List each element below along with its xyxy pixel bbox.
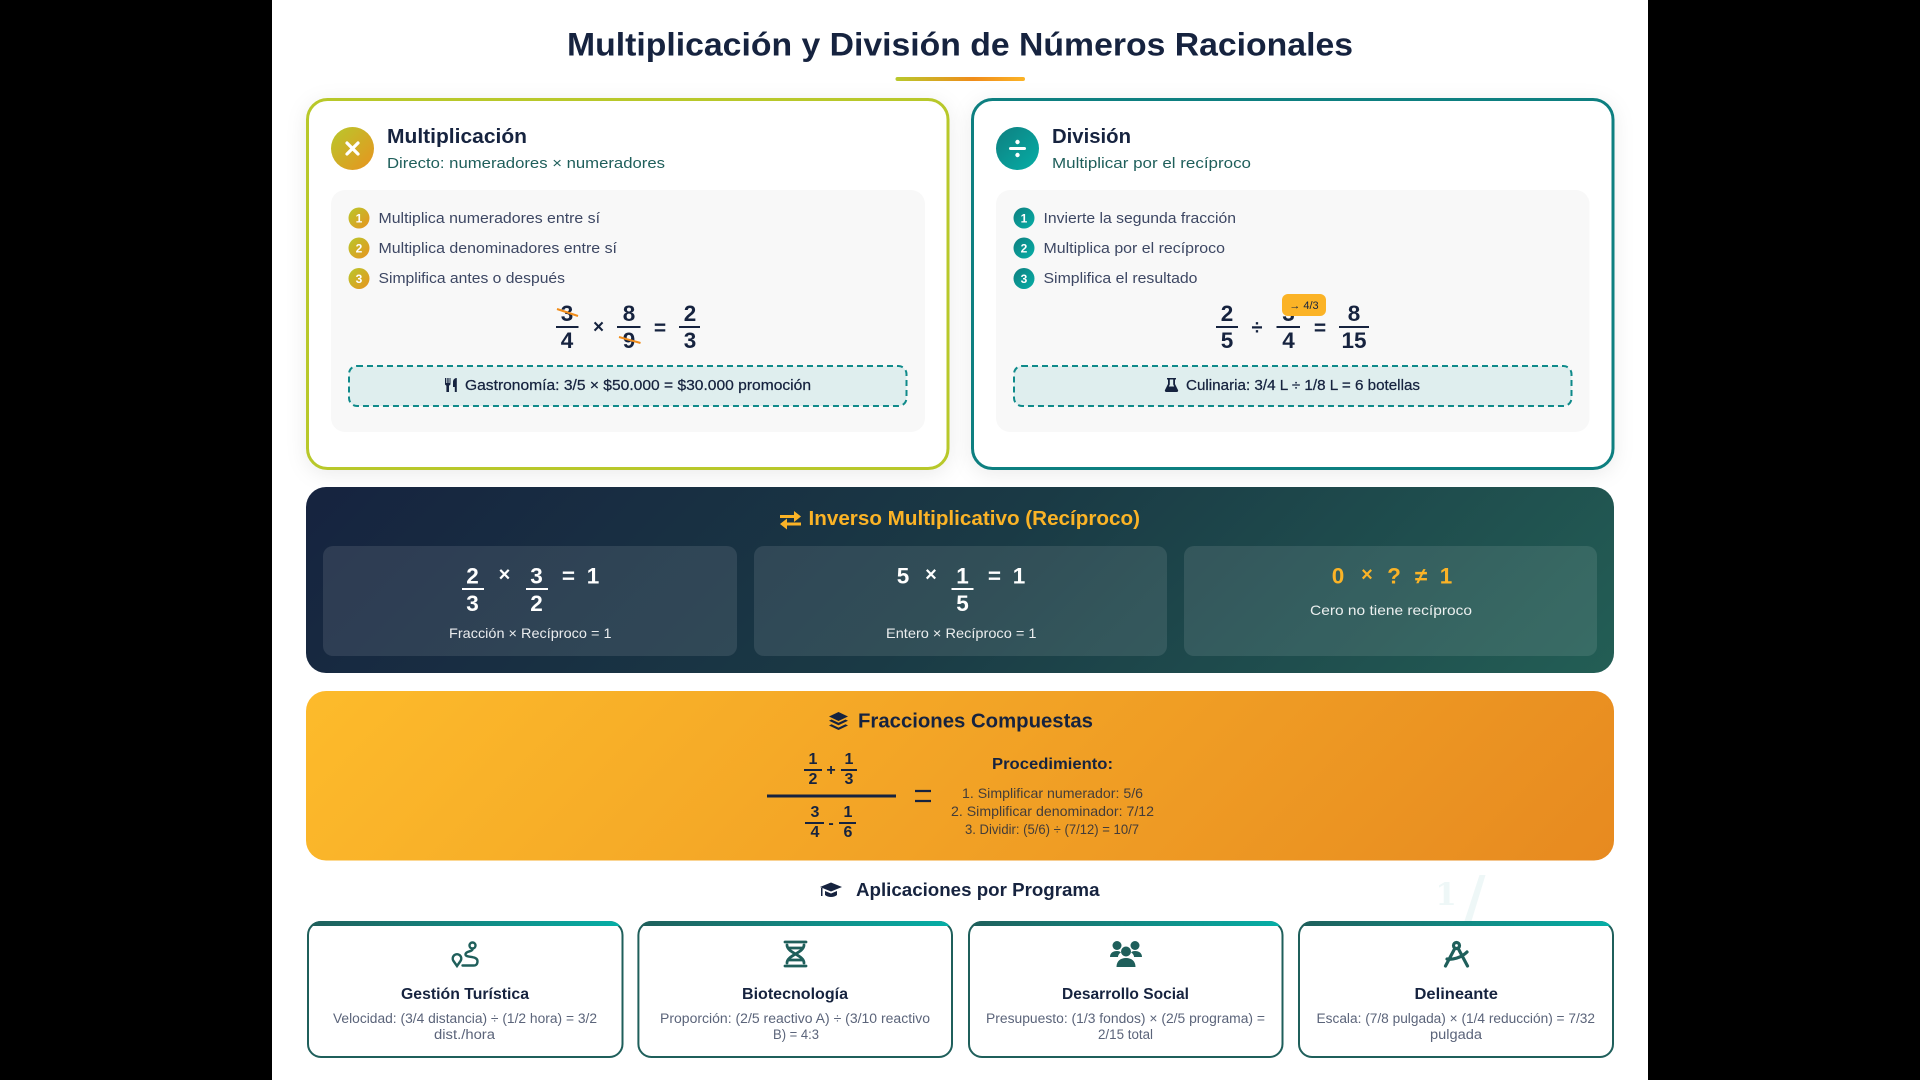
icon: dna: [785, 942, 806, 966]
badge: reciprocal: [1282, 294, 1326, 316]
step 3: [1014, 268, 1198, 289]
card: cero: ≠: [1415, 564, 1428, 588]
formula: multiplication: 2: [684, 301, 696, 326]
step 3: 3: [356, 272, 363, 286]
decorative watermark fraction: 1: [1435, 877, 1457, 913]
procedure: 1. Simplificar numerador: 5/6: [962, 785, 1143, 801]
card: entero: 5: [956, 591, 969, 616]
compound fraction: 3: [845, 771, 854, 788]
compound fraction: 1: [845, 751, 854, 768]
card: fracción: =: [562, 564, 575, 588]
step 2: Multiplica por el recíproco: [1044, 241, 1225, 257]
compound fraction: 1: [844, 804, 853, 821]
panel: fracciones compuestas: [306, 691, 1614, 860]
steps panel: [331, 190, 925, 432]
step 3: Simplifica antes o después: [378, 271, 565, 287]
step 1: 1: [1021, 212, 1028, 226]
white page column: [272, 0, 1648, 1080]
icon: multiply: [331, 127, 374, 170]
card: cero: ?: [1387, 564, 1401, 588]
card: entero: ×: [925, 564, 937, 586]
example callout: culinaria: Culinaria: 3/4 L ÷ 1/8 L = 6 botellas: [1186, 378, 1420, 394]
card: fracción: 3: [466, 591, 479, 616]
card: biotecnología: Proporción: (2/5 reactivo A) ÷ (3/10 reactivo: [660, 1011, 930, 1026]
title underline: [896, 77, 1025, 81]
card: entero: =: [988, 564, 1001, 588]
step 2: 2: [356, 242, 363, 256]
compound fraction: 4: [811, 824, 820, 841]
heading: Multiplicación: [387, 126, 527, 148]
panel: multiplicación: [308, 100, 948, 468]
example callout: gastronomía: [349, 366, 906, 406]
compound fraction: 6: [844, 824, 853, 841]
formula: multiplication: 9: [623, 328, 635, 353]
compound fraction: -: [828, 815, 834, 832]
formula: division: 3: [1282, 301, 1295, 326]
icon: utensils: [445, 378, 457, 392]
formula: division: ÷: [1252, 317, 1263, 339]
subtitle: Directo: numeradores × numeradores: [387, 155, 665, 172]
heading: División: [1052, 126, 1131, 148]
badge: reciprocal: → 4/3: [1289, 300, 1319, 312]
formula: division: 5: [1221, 328, 1233, 353]
step 1: Multiplica numeradores entre sí: [378, 211, 600, 227]
panel: inverso multiplicativo: [306, 487, 1614, 673]
steps panel: [996, 190, 1590, 432]
compound fraction: 3: [811, 804, 820, 821]
card: cero: 1: [1440, 564, 1452, 588]
formula: multiplication: 3: [684, 328, 696, 353]
procedure: [951, 756, 1154, 837]
card: cero: 0: [1332, 564, 1344, 588]
step 3: Simplifica el resultado: [1044, 271, 1198, 287]
step 2: [348, 238, 617, 258]
title: Multiplicación y División de Números Racionales: [567, 26, 1353, 62]
icon: graduation cap: [820, 882, 842, 897]
card: fracción: 2: [530, 591, 543, 616]
card: entero: 1: [1013, 564, 1025, 588]
icon: users: [1110, 941, 1142, 967]
icon: flask: [1165, 378, 1178, 392]
card: entero: Entero × Recíproco = 1: [886, 625, 1037, 641]
step 1: [1014, 208, 1236, 228]
formula: division: 4: [1282, 328, 1295, 353]
card: gestión turística: Velocidad: (3/4 distancia) ÷ (1/2 hora) = 3/2: [333, 1011, 597, 1026]
formula: division: [1216, 294, 1369, 353]
card: delineante: [1299, 921, 1613, 1057]
procedure: Procedimiento:: [992, 756, 1113, 773]
decorative watermark fraction: [1435, 875, 1486, 921]
compound fraction: +: [826, 762, 836, 779]
card: entero: 5: [897, 564, 909, 588]
card: desarrollo social: [969, 921, 1282, 1057]
card: fracción: [323, 546, 737, 656]
formula: multiplication: 3: [561, 301, 573, 326]
card: desarrollo social: 2/15 total: [1098, 1027, 1153, 1042]
compound fraction: 1: [809, 751, 818, 768]
card: desarrollo social: Presupuesto: (1/3 fondos) × (2/5 programa) =: [986, 1011, 1265, 1026]
step 3: 3: [1021, 272, 1028, 286]
formula: multiplication: =: [654, 317, 666, 340]
card: delineante: Delineante: [1414, 986, 1498, 1003]
card: fracción: 3: [530, 564, 543, 588]
procedure: 2. Simplificar denominador: 7/12: [951, 803, 1154, 819]
card: fracción: Fracción × Recíproco = 1: [449, 625, 612, 641]
step 2: Multiplica denominadores entre sí: [378, 241, 617, 257]
compound fraction: 2: [809, 771, 818, 788]
card: cero: Cero no tiene recíproco: [1310, 602, 1472, 618]
card: cero: [1184, 546, 1597, 656]
card: biotecnología: B) = 4:3: [773, 1027, 819, 1042]
equals sign: [915, 791, 931, 801]
formula: division: 15: [1341, 328, 1367, 353]
procedure: 3. Dividir: (5/6) ÷ (7/12) = 10/7: [965, 821, 1139, 837]
step 1: Invierte la segunda fracción: [1044, 211, 1236, 227]
section: aplicaciones: [820, 880, 1101, 900]
step 2: [1014, 238, 1225, 258]
icon: exchange arrows: [780, 511, 801, 530]
heading: Fracciones Compuestas: [858, 710, 1093, 732]
card: gestión turística: [308, 921, 622, 1057]
card: biotecnología: Biotecnología: [742, 986, 848, 1003]
step 1: 1: [356, 212, 363, 226]
subtitle: Multiplicar por el recíproco: [1052, 155, 1251, 172]
card: entero: 1: [956, 564, 969, 588]
formula: division: 8: [1348, 301, 1360, 326]
example callout: gastronomía: Gastronomía: 3/5 × $50.000 = $30.000 promoción: [465, 378, 811, 394]
panel: división: [972, 100, 1613, 468]
formula: division: =: [1314, 317, 1326, 340]
formula: multiplication: 4: [561, 328, 574, 353]
icon: layers: [829, 712, 848, 730]
heading: Aplicaciones por Programa: [856, 880, 1101, 900]
card: desarrollo social: Desarrollo Social: [1062, 986, 1189, 1003]
heading: Inverso Multiplicativo (Recíproco): [808, 508, 1140, 530]
step 3: [348, 268, 565, 289]
card: gestión turística: dist./hora: [434, 1027, 496, 1042]
step 1: [348, 208, 600, 228]
icon: compass: [1446, 942, 1468, 966]
card: biotecnología: [638, 921, 952, 1057]
formula: multiplication: ×: [593, 317, 604, 338]
card: fracción: 1: [587, 564, 599, 588]
formula: multiplication: [556, 301, 700, 353]
card: fracción: ×: [499, 564, 510, 586]
step 2: 2: [1021, 242, 1028, 256]
compound fraction: [767, 751, 896, 841]
example callout: culinaria: [1014, 366, 1572, 406]
card: delineante: pulgada: [1430, 1027, 1483, 1042]
card: delineante: Escala: (7/8 pulgada) × (1/4 reducción) = 7/32: [1316, 1011, 1595, 1026]
icon: divide: [996, 127, 1039, 170]
card: gestión turística: Gestión Turística: [401, 986, 529, 1003]
card: cero: ×: [1361, 564, 1373, 586]
icon: route: [453, 942, 478, 966]
card: entero: [754, 546, 1167, 656]
formula: multiplication: 8: [623, 301, 635, 326]
card: fracción: 2: [466, 564, 479, 588]
formula: division: 2: [1221, 301, 1233, 326]
